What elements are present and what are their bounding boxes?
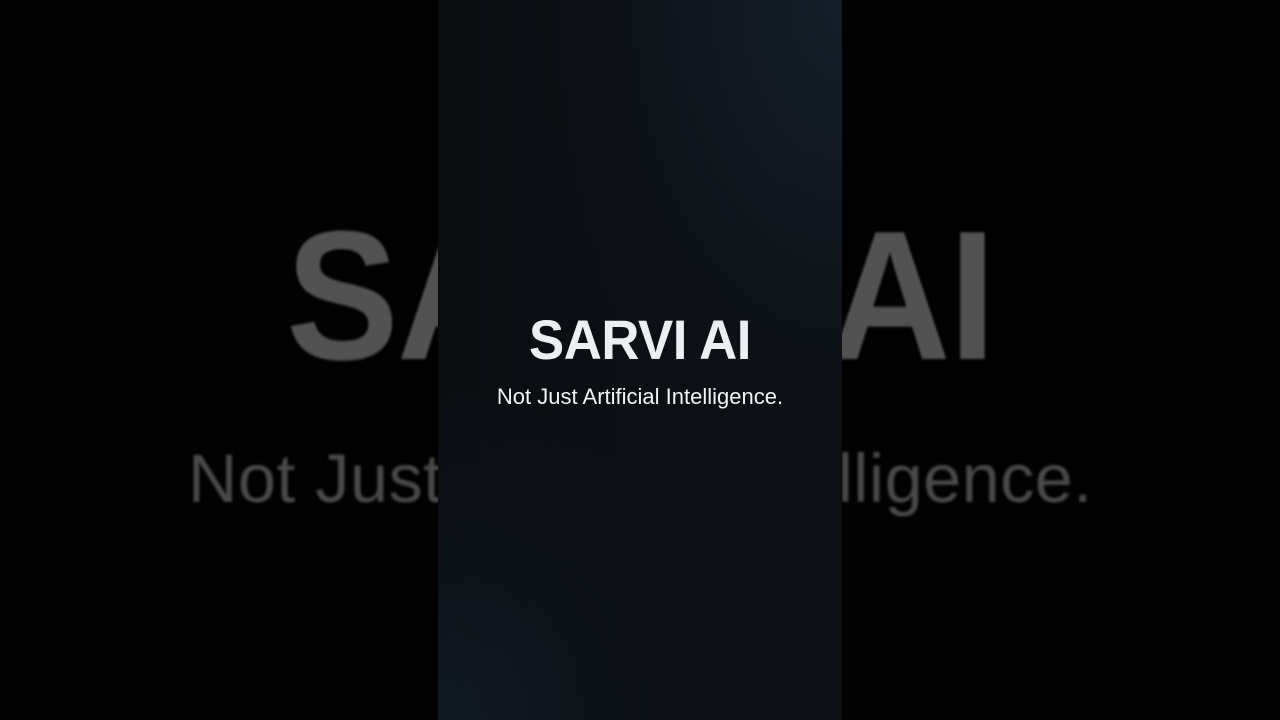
blurred large title: SARVI AI	[286, 192, 994, 398]
subtitle: Not Just Artificial Intelligence.	[497, 384, 783, 409]
blurred large subtitle: Not Just Artificial Intelligence.	[188, 440, 1093, 517]
title: SARVI AI	[529, 308, 751, 371]
central video panel	[438, 0, 842, 720]
